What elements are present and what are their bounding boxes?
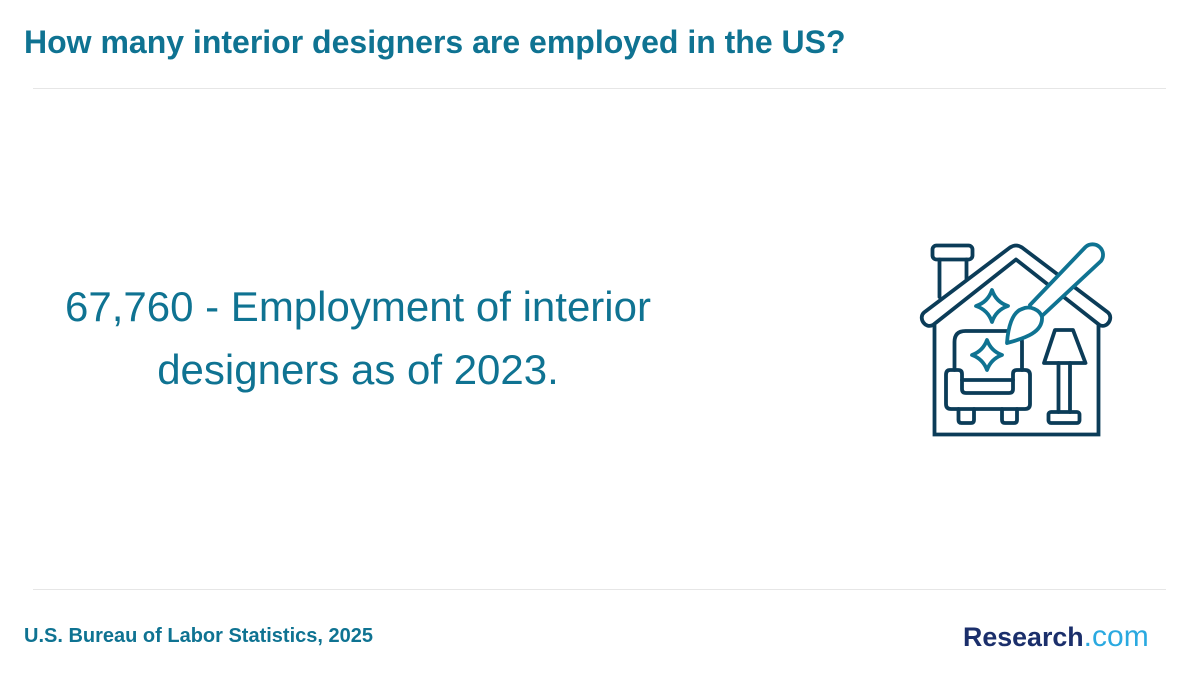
- sparkles: [972, 290, 1008, 370]
- main statistic text: [65, 283, 651, 393]
- house walls: [934, 325, 1098, 434]
- source note: U.S. Bureau of Labor Statistics, 2025: [24, 625, 373, 647]
- main statistic text: designers as of 2023.: [157, 346, 559, 393]
- icon: house with armchair, lamp and paintbrush: [920, 242, 1112, 436]
- floor lamp: [1044, 330, 1086, 423]
- armchair: [946, 331, 1030, 423]
- roof: [922, 246, 1110, 326]
- chimney: [932, 246, 972, 297]
- paintbrush: [1007, 244, 1103, 343]
- title: How many interior designers are employed in the US?: [24, 24, 846, 60]
- main statistic text: 67,760 - Employment of interior: [65, 283, 651, 330]
- logo: Research.com: Research.com: [963, 620, 1149, 653]
